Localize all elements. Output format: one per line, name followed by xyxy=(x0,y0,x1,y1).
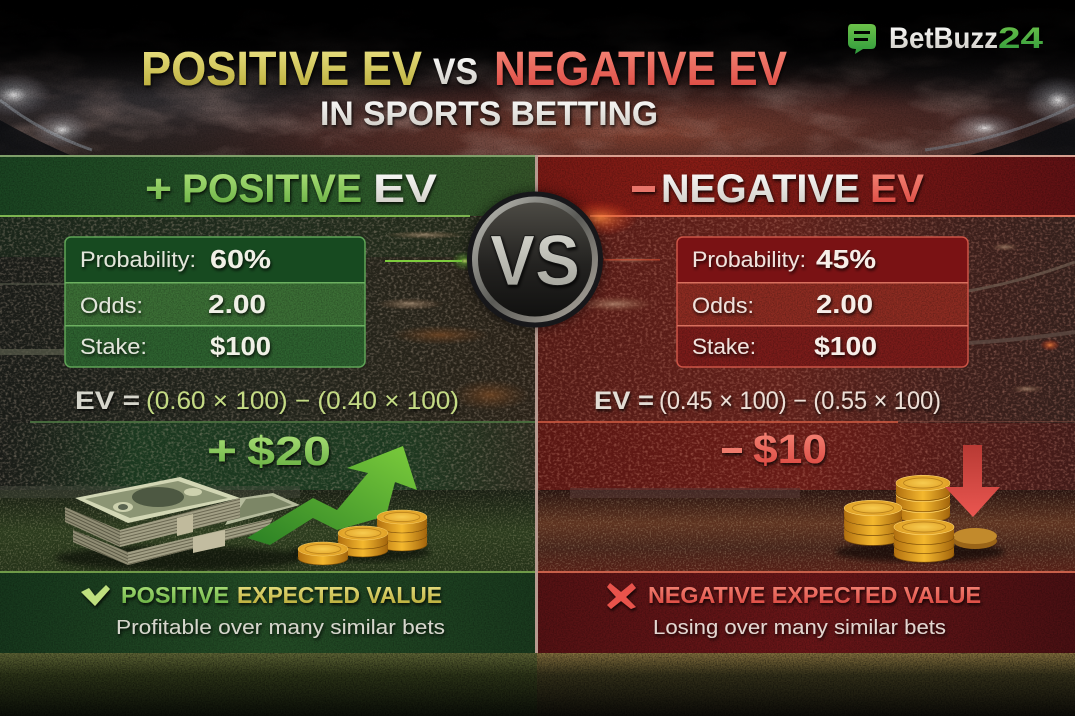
footer: positive expected value: Profitable over many similar bets xyxy=(116,616,445,639)
logo: BetBuzz24: BetBuzz xyxy=(889,22,998,55)
result: + $20 xyxy=(207,427,331,474)
title: IN SPORTS BETTING xyxy=(320,95,658,133)
result: + $20: + xyxy=(207,427,237,474)
result: + $20: $20 xyxy=(247,428,331,474)
title: VS xyxy=(433,51,478,92)
table: negative inputs: Stake: xyxy=(692,334,756,359)
heading: - negative EV: NEGATIVE xyxy=(661,167,860,211)
panel background: green field xyxy=(0,155,535,573)
panel: negative EV xyxy=(538,155,1075,653)
logo: BetBuzz24 xyxy=(848,22,1043,55)
icon: cross mark xyxy=(607,583,636,609)
formula: negative EV: EV = xyxy=(594,387,654,415)
panel background: red field xyxy=(538,155,1075,573)
result: - $10 xyxy=(722,426,827,472)
title: POSITIVE EV xyxy=(141,43,422,96)
heading: + positive EV: EV xyxy=(373,167,437,211)
heading: + positive EV: POSITIVE xyxy=(182,167,362,211)
footer: negative expected value xyxy=(538,571,1075,653)
VS badge: VS xyxy=(490,222,580,301)
table: positive inputs: 60% xyxy=(210,244,271,274)
footer: negative expected value: NEGATIVE EXPECTED VALUE xyxy=(648,582,981,608)
result: - $10: $10 xyxy=(753,426,827,472)
table: positive inputs xyxy=(65,237,365,367)
footer: positive expected value xyxy=(0,571,535,653)
icon: check mark xyxy=(81,585,110,606)
formula: negative EV: (0.45 × 100) − (0.55 × 100) xyxy=(659,387,941,415)
table: positive inputs: $100 xyxy=(210,331,271,361)
footer: negative expected value: Losing over many similar bets xyxy=(653,616,946,639)
VS badge xyxy=(385,192,660,328)
icon: rising green arrow xyxy=(247,446,417,545)
table: positive inputs: Odds: xyxy=(80,293,143,318)
icon: logo mark xyxy=(848,24,876,54)
table: negative inputs: 45% xyxy=(816,244,876,274)
table: positive inputs: Stake: xyxy=(80,334,147,359)
background: stadium header xyxy=(0,0,1075,156)
icon: gold coins and down arrow xyxy=(835,445,1005,562)
table: negative inputs: Odds: xyxy=(692,293,754,318)
title xyxy=(141,43,787,133)
logo: BetBuzz24: 24 xyxy=(998,22,1043,55)
divider between panels xyxy=(535,155,538,653)
heading: - negative EV xyxy=(632,167,924,211)
formula: positive EV: (0.60 × 100) − (0.40 × 100) xyxy=(146,387,459,415)
icon: gold coins xyxy=(290,510,430,565)
table: positive inputs: 2.00 xyxy=(208,289,266,319)
footer: positive expected value: POSITIVE xyxy=(121,582,229,608)
icon: red down arrow xyxy=(945,445,1000,517)
table: negative inputs: $100 xyxy=(814,331,877,361)
formula: positive EV: EV = xyxy=(75,387,140,415)
bottom grass strip xyxy=(0,653,1075,716)
table: negative inputs xyxy=(677,237,968,367)
footer: positive expected value: EXPECTED VALUE xyxy=(237,582,442,608)
heading: + positive EV: + xyxy=(145,167,172,211)
table: negative inputs: 2.00 xyxy=(816,289,873,319)
icon: cash stacks xyxy=(55,477,305,570)
title: NEGATIVE EV xyxy=(494,43,787,96)
panel: positive EV xyxy=(0,155,535,653)
heading: - negative EV: EV xyxy=(870,167,924,211)
table: positive inputs: Probability: xyxy=(80,247,196,272)
table: negative inputs: Probability: xyxy=(692,247,806,272)
heading: + positive EV xyxy=(145,167,437,211)
